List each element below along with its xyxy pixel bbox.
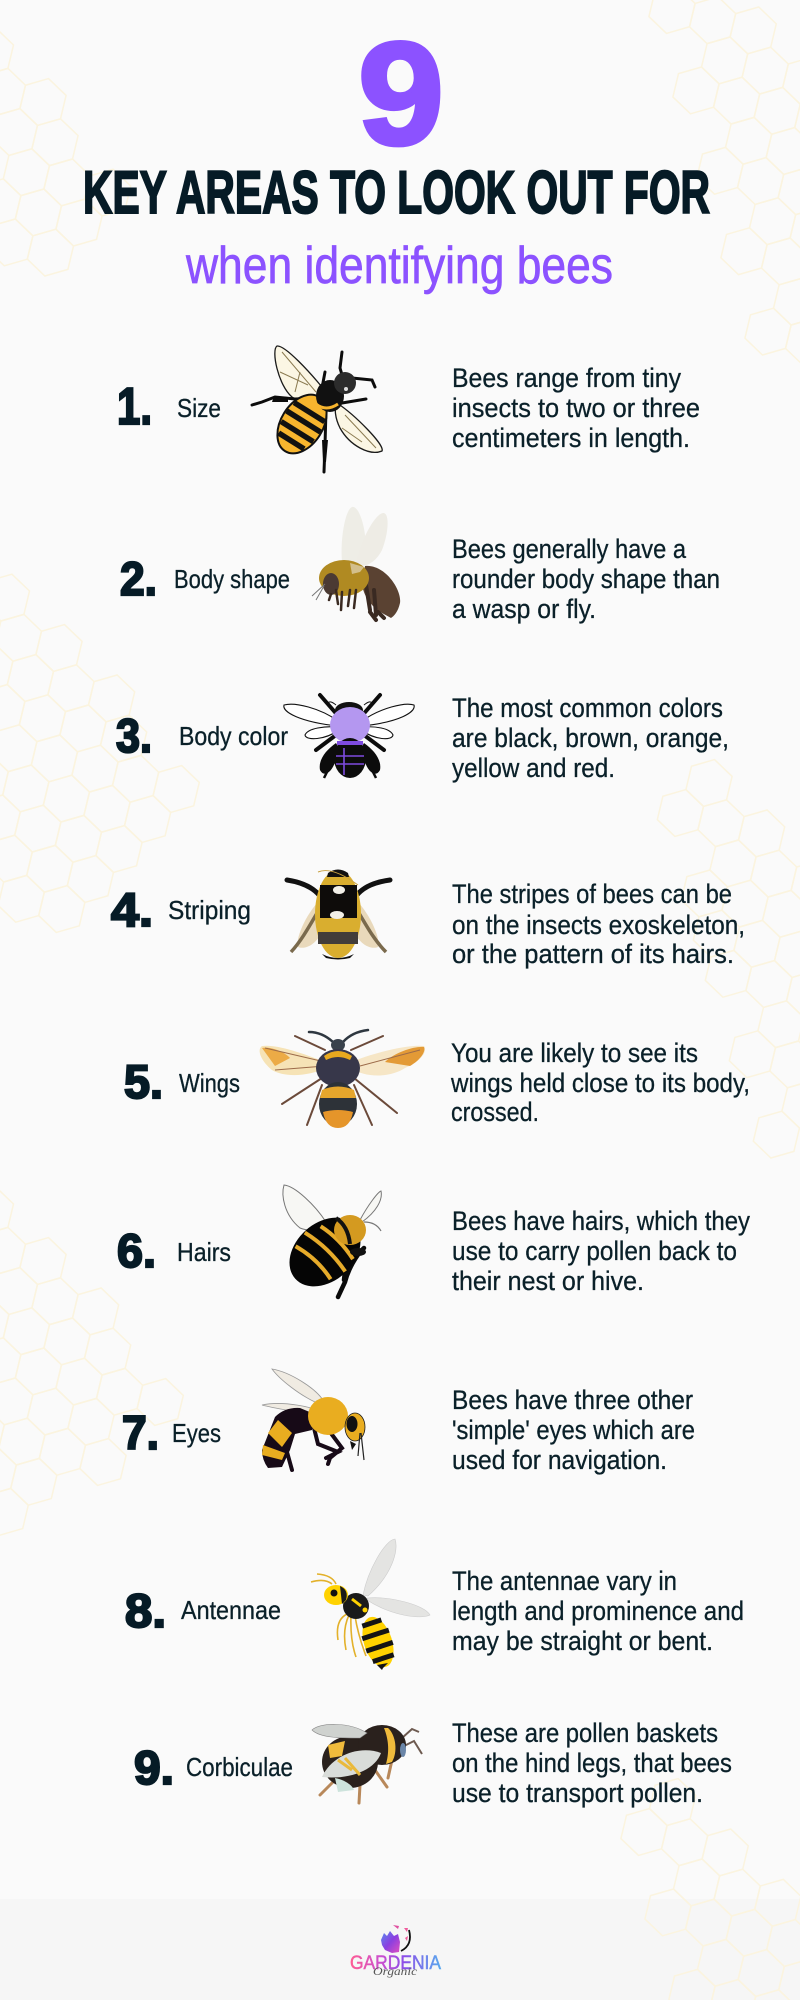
description 5: crossed. xyxy=(451,1097,539,1127)
description 2: a wasp or fly. xyxy=(452,594,596,624)
label: body color: Body color xyxy=(179,721,288,751)
row 6: hairs xyxy=(117,1185,750,1300)
row 8: antennae xyxy=(125,1539,744,1671)
description 6: their nest or hive. xyxy=(452,1266,644,1296)
number 7: 7. xyxy=(122,1406,159,1459)
description 7: Bees have three other xyxy=(452,1385,693,1415)
description 1: centimeters in length. xyxy=(452,423,690,453)
icon: yellow bee side view with large eye xyxy=(262,1369,365,1470)
description 2 xyxy=(452,534,720,624)
logo script: Organic xyxy=(373,1964,418,1978)
description 6: use to carry pollen back to xyxy=(452,1236,737,1266)
row 4: striping xyxy=(111,870,745,969)
logo mark xyxy=(381,1925,410,1953)
description 3: are black, brown, orange, xyxy=(452,723,729,753)
number 2: 2. xyxy=(120,552,157,605)
icon: watercolor bee with spread wings xyxy=(260,1030,425,1128)
description 8: may be straight or bent. xyxy=(452,1626,713,1656)
description 3: The most common colors xyxy=(452,693,723,723)
description 6 xyxy=(452,1206,750,1296)
icon: bumblebee from above xyxy=(287,870,390,960)
number 6: 6. xyxy=(117,1224,156,1277)
description 7: 'simple' eyes which are xyxy=(452,1415,695,1445)
description 6: Bees have hairs, which they xyxy=(452,1206,750,1236)
icon: watercolor bumblebee with pollen baskets xyxy=(312,1724,422,1803)
description 5: You are likely to see its xyxy=(451,1038,698,1068)
description 4: The stripes of bees can be xyxy=(452,879,732,909)
big number 9: 9 xyxy=(358,12,444,175)
number 4: 4. xyxy=(111,883,153,936)
description 4: or the pattern of its hairs. xyxy=(452,939,734,969)
row 2: body shape xyxy=(120,507,720,624)
row 5: wings xyxy=(124,1030,750,1128)
description 8 xyxy=(452,1566,744,1656)
description 7: used for navigation. xyxy=(452,1445,667,1475)
number 8: 8. xyxy=(125,1584,166,1637)
icon: black and yellow bee from above xyxy=(252,346,382,472)
description 2: Bees generally have a xyxy=(452,534,687,564)
description 9: on the hind legs, that bees xyxy=(452,1748,732,1778)
logo: Gardenia Organic xyxy=(350,1925,441,1978)
row 9: corbiculae xyxy=(134,1718,732,1808)
description 1: Bees range from tiny xyxy=(452,363,681,393)
number 3: 3. xyxy=(116,709,152,762)
label: striping: Striping xyxy=(168,895,251,925)
description 9: These are pollen baskets xyxy=(452,1718,718,1748)
number 1: 1. xyxy=(117,378,152,436)
description 3 xyxy=(452,693,729,783)
description 5 xyxy=(450,1038,750,1127)
footer band xyxy=(0,1899,800,2000)
description 3: yellow and red. xyxy=(452,753,615,783)
label: size: Size xyxy=(177,393,221,423)
description 5: wings held close to its body, xyxy=(450,1068,750,1098)
description 1: insects to two or three xyxy=(452,393,700,423)
icon: brown side-view bee xyxy=(312,507,400,620)
label: antennae: Antennae xyxy=(181,1595,281,1625)
label: wings: Wings xyxy=(179,1068,240,1098)
description 9: use to transport pollen. xyxy=(452,1778,703,1808)
number 5: 5. xyxy=(124,1055,163,1108)
icon: purple and black bee xyxy=(284,695,414,778)
description 4 xyxy=(452,879,745,969)
description 1 xyxy=(452,363,700,453)
description 2: rounder body shape than xyxy=(452,564,720,594)
logo wordmark: GARDENIA xyxy=(350,1953,441,1974)
label: body shape: Body shape xyxy=(174,564,290,594)
label: eyes: Eyes xyxy=(172,1418,221,1448)
description 7 xyxy=(452,1385,695,1475)
number 9: 9. xyxy=(134,1741,174,1794)
row 7: eyes xyxy=(122,1369,695,1475)
description 9 xyxy=(452,1718,732,1808)
description 8: The antennae vary in xyxy=(452,1566,677,1596)
label: corbiculae: Corbiculae xyxy=(186,1752,293,1782)
label: hairs: Hairs xyxy=(177,1237,231,1267)
row 1: size xyxy=(117,346,700,472)
description 8: length and prominence and xyxy=(452,1596,744,1626)
description 4: on the insects exoskeleton, xyxy=(452,910,745,940)
subtitle: when identifying bees xyxy=(185,237,613,295)
icon: wasp-like bee with golden antennae xyxy=(311,1539,430,1671)
icon: hairy black and yellow bee xyxy=(276,1185,381,1300)
row 3: body color xyxy=(116,693,729,783)
